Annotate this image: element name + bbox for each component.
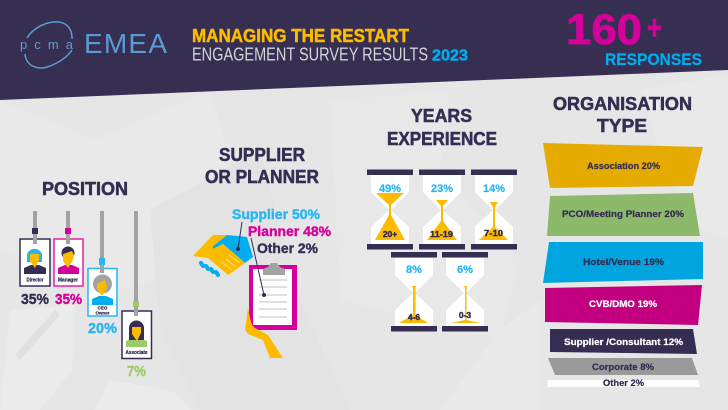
- hourglass: 4-6: 8%: [406, 264, 422, 276]
- supplier planner percentages: [232, 206, 332, 256]
- logo: pcma EMEA: [20, 22, 167, 68]
- percentages: [21, 291, 146, 380]
- heading: position: POSITION: [42, 179, 128, 199]
- response count: 160: [566, 6, 642, 54]
- bar: CVB DMO: CVB/DMO 19%: [589, 299, 657, 309]
- panel: years experience: [367, 106, 517, 332]
- bar: association: Association 20%: [587, 161, 660, 171]
- subtitle: ENGAGEMENT SURVEY RESULTS: [192, 44, 428, 64]
- hourglass: 4-6: [391, 252, 437, 332]
- response count: RESPONSES: [605, 50, 702, 69]
- hourglass: 4-6: 4-6: [408, 312, 420, 322]
- percentages: 7%: [127, 363, 146, 380]
- leader lines: [236, 222, 266, 296]
- bar: hotel venue: Hotel/Venue 19%: [583, 257, 664, 267]
- hourglass: 7-10: 7-10: [484, 228, 503, 238]
- title: MANAGING THE RESTART: [192, 26, 409, 46]
- badge: director: [20, 211, 50, 286]
- supplier planner percentages: Supplier 50%: [232, 206, 321, 222]
- heading: organisation type: TYPE: [597, 116, 647, 136]
- bar: PCO meeting planner: [547, 193, 700, 236]
- response count: +: [647, 9, 662, 47]
- bar: other: Other 2%: [603, 378, 644, 388]
- heading: years experience: YEARS: [411, 106, 472, 126]
- heading: organisation type: [553, 94, 692, 136]
- bar: PCO meeting planner: PCO/Meeting Planner 20%: [562, 209, 684, 219]
- badge: associate: [122, 211, 152, 358]
- percentages: 20%: [88, 320, 117, 337]
- bar: corporate: Corporate 8%: [592, 362, 654, 372]
- hourglass: 7-10: 14%: [483, 183, 505, 195]
- percentages: 35%: [21, 291, 49, 308]
- hourglass: 11-19: 11-19: [430, 229, 453, 239]
- hourglass: 11-19: 23%: [431, 183, 453, 195]
- heading: years experience: [387, 106, 497, 149]
- supplier planner percentages: Planner 48%: [248, 223, 332, 239]
- bar: corporate: [548, 358, 698, 375]
- logo: pcma EMEA: pcma: [20, 37, 74, 52]
- subtitle: 2023: [432, 48, 468, 64]
- percentages: 35%: [55, 291, 82, 308]
- hourglass: 11-19: [419, 170, 465, 250]
- hourglass: 0-3: [442, 252, 488, 332]
- hourglass: 0-3: 6%: [457, 264, 473, 276]
- bar: supplier consultant: [550, 329, 697, 354]
- hourglass: 20+: [367, 170, 413, 250]
- icon: hand and clipboard: [245, 263, 297, 358]
- hourglass: 20+: 20+: [383, 229, 397, 239]
- heading: organisation type: ORGANISATION: [553, 94, 692, 114]
- heading: supplier or planner: [205, 145, 319, 187]
- supplier planner percentages: Other 2%: [257, 240, 319, 256]
- icon: handshake: [193, 235, 253, 275]
- badge: CEO owner: [88, 211, 117, 316]
- response count: [566, 6, 702, 69]
- logo: pcma EMEA: EMEA: [84, 28, 167, 59]
- heading: years experience: EXPERIENCE: [387, 129, 497, 149]
- badge: manager: [54, 211, 83, 286]
- hourglass: 7-10: [471, 170, 517, 250]
- panel: organisation type: [543, 94, 703, 388]
- heading: supplier or planner: SUPPLIER: [219, 145, 305, 165]
- badge: director: Director: [26, 278, 44, 284]
- header band: [0, 0, 728, 100]
- badge: manager: Manager: [58, 278, 78, 284]
- panel: supplier or planner: [193, 145, 332, 358]
- badge: associate: Associate: [126, 350, 148, 356]
- bar: association: [543, 143, 703, 188]
- bar: supplier consultant: Supplier /Consultant 12%: [564, 337, 683, 347]
- panel: position: [20, 179, 152, 380]
- bar: CVB DMO: [545, 285, 702, 325]
- badge: CEO owner: Owner: [95, 310, 110, 316]
- bar: other: [547, 378, 700, 388]
- heading: supplier or planner: OR PLANNER: [205, 167, 319, 187]
- hourglass: 0-3: 0-3: [459, 310, 471, 320]
- bar: hotel venue: [543, 242, 703, 283]
- hourglass: 20+: 49%: [379, 183, 401, 195]
- badge: CEO owner: CEO: [98, 306, 108, 310]
